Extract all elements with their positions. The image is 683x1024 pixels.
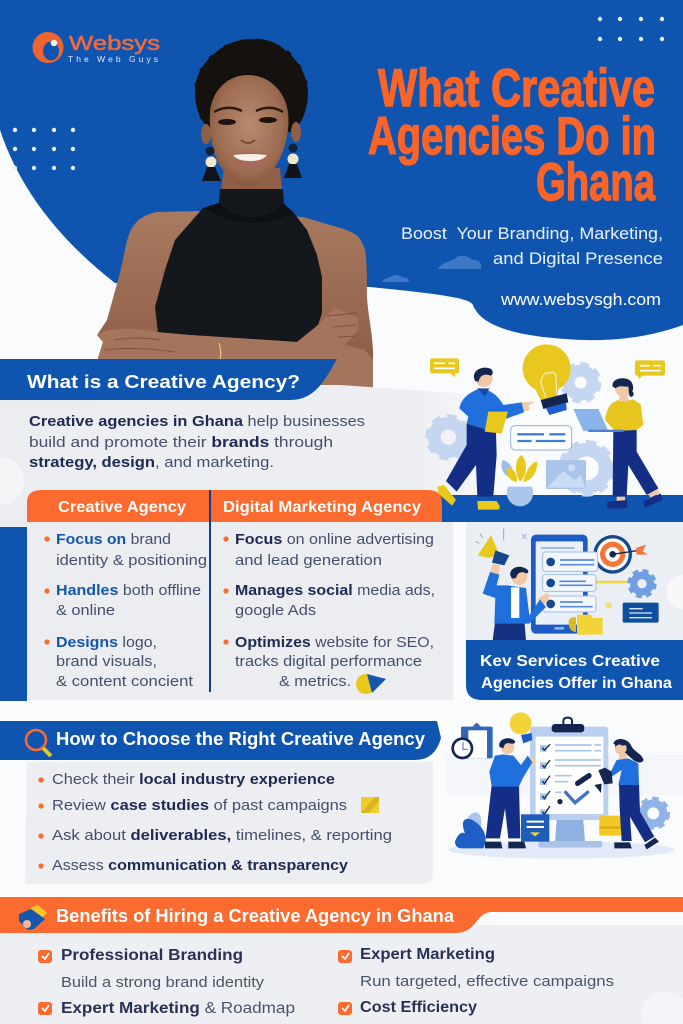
illustration: team with lightbulb	[428, 344, 665, 510]
target	[593, 535, 648, 574]
decorative circles	[0, 457, 421, 871]
title	[368, 59, 656, 212]
table body	[27, 522, 453, 700]
subtitle: Boost Your Branding, Marketing,	[401, 224, 663, 243]
digital marketing agency list: and lead generation	[235, 552, 382, 569]
table header: orange	[27, 490, 442, 522]
bracelet	[219, 343, 221, 360]
services label text: Kev Services Creative	[480, 653, 660, 670]
checklist text: Ask about deliverables, timelines, & reporting	[52, 827, 392, 844]
neck	[220, 168, 283, 198]
dots left	[13, 128, 75, 170]
digital marketing agency list: google Ads	[235, 602, 316, 619]
icon: sticky note	[361, 797, 379, 813]
creative agency list: & content concient	[56, 673, 194, 690]
gear	[639, 799, 668, 828]
cards	[543, 552, 598, 612]
expert marketing: Run targeted, effective campaigns	[360, 974, 614, 990]
gears	[428, 364, 613, 494]
turtleneck collar shade	[203, 203, 293, 223]
gear	[629, 571, 655, 596]
creative agency list: Handles both offline	[56, 582, 201, 599]
logo: Websys: Websys	[69, 33, 160, 55]
heading: how to choose	[0, 721, 441, 760]
digital marketing agency list: Optimizes website for SEO,	[235, 634, 434, 651]
website url: www.websysgh.com	[500, 290, 661, 309]
text block: definition: strategy, design , and marketing.	[29, 454, 274, 471]
ears	[201, 122, 301, 144]
checklist rows	[555, 745, 601, 792]
text block: definition: build and promote their brands through	[29, 434, 333, 451]
divider	[209, 490, 211, 692]
yellow bag	[599, 816, 621, 836]
logo: Websys: The Web Guys	[68, 54, 158, 64]
side clipboard and clock	[451, 723, 493, 759]
checklist text: Check their local industry experience	[52, 771, 335, 788]
services label text	[480, 653, 672, 692]
speech bubbles	[430, 358, 665, 379]
comparison table	[27, 490, 453, 700]
digital marketing agency list: Focus on online advertising	[235, 531, 434, 548]
clipboard	[530, 727, 608, 820]
megaphone	[478, 535, 509, 565]
creative agency list: & online	[56, 602, 115, 619]
man in blue jacket	[483, 564, 549, 640]
logo: Websys	[32, 32, 160, 64]
small sticker	[605, 602, 612, 609]
professional branding: Build a strong brand identity	[61, 975, 265, 991]
panel: what is a creative agency background	[0, 385, 513, 700]
arms and shoulders	[97, 211, 373, 390]
blue band	[440, 495, 683, 522]
icon: magnifier	[26, 730, 51, 756]
man	[437, 368, 535, 510]
digital marketing agency list: Manages social media ads,	[235, 582, 435, 599]
message card	[623, 603, 659, 623]
services label box	[466, 640, 683, 700]
panel: how to choose body	[25, 762, 433, 884]
subtitle: and Digital Presence	[493, 249, 663, 268]
folder	[569, 615, 603, 635]
nose	[241, 140, 255, 143]
plant and pot	[501, 455, 537, 506]
heading: what is a creative agency	[0, 359, 337, 400]
text block: definition	[29, 413, 365, 471]
column heading: digital marketing agency: Digital Marketing Agency	[223, 499, 421, 516]
heading: what is a creative agency: What is a Creative Agency?	[27, 372, 300, 392]
illustration: checklist team	[445, 712, 683, 859]
creative agency list: Focus on brand	[56, 531, 171, 548]
decorative circle benefits	[641, 991, 683, 1024]
expert marketing: Expert Marketing	[360, 946, 495, 963]
services label text: Agencies Offer in Ghana	[481, 675, 672, 692]
plant	[455, 812, 486, 848]
eyes and brows	[214, 108, 283, 125]
text block: definition: Creative agencies in Ghana help businesses	[29, 413, 365, 430]
illustration: phone, target and marketer	[475, 529, 659, 640]
icon: pie chart	[356, 674, 386, 694]
cloud decorations	[382, 256, 481, 282]
cost efficiency: Cost Efficiency	[360, 999, 477, 1016]
bullets	[44, 536, 229, 645]
checklist text: Review case studies of past campaigns	[52, 797, 347, 814]
black sleeveless top	[155, 189, 322, 342]
marks	[475, 529, 504, 543]
professional branding: Professional Branding	[61, 947, 243, 964]
bulb	[510, 712, 532, 743]
heading: how to choose: How to Choose the Right Creative Agency	[56, 729, 425, 749]
ground	[448, 841, 675, 859]
checklist text: Assess communication & transparency	[52, 857, 349, 874]
small blue card	[521, 814, 549, 842]
earrings	[202, 144, 302, 181]
yellow connector	[596, 581, 629, 583]
digital marketing agency list: & metrics.	[279, 673, 351, 690]
woman with laptop	[573, 378, 663, 508]
backdrop band	[445, 755, 683, 795]
face	[210, 75, 289, 187]
panel: benefits body	[0, 925, 683, 1024]
man	[485, 738, 536, 848]
chat card	[511, 426, 572, 450]
expert marketing	[360, 946, 614, 990]
heading: benefits	[0, 897, 683, 933]
woman portrait	[97, 38, 373, 390]
dots top right	[598, 17, 664, 41]
phone	[531, 535, 588, 634]
woman	[598, 739, 659, 849]
professional branding	[61, 947, 265, 991]
folded arm	[97, 308, 373, 390]
column heading: creative agency: Creative Agency	[58, 499, 186, 516]
benefits checklist	[38, 946, 614, 1017]
panel: key services	[466, 522, 683, 700]
panel left blue strip	[0, 527, 27, 701]
creative agency list	[56, 531, 207, 690]
digital marketing agency list	[235, 531, 435, 690]
subtitle	[401, 224, 663, 268]
icon: handshake	[19, 905, 47, 930]
smile	[230, 152, 270, 168]
check icons	[38, 950, 352, 1015]
creative agency list: identity & positioning	[56, 552, 207, 569]
monitor stand	[555, 820, 585, 842]
picture card	[546, 460, 586, 489]
bullets	[38, 777, 44, 869]
arrows	[566, 776, 589, 803]
hair	[194, 38, 308, 132]
heading: benefits: Benefits of Hiring a Creative Agency in Ghana	[56, 906, 455, 926]
fingers	[105, 313, 357, 352]
creative agency list: Designs logo,	[56, 634, 157, 651]
lightbulb	[523, 344, 571, 415]
checklist text	[52, 771, 392, 874]
digital marketing agency list: tracks digital performance	[235, 653, 422, 670]
header blue shape	[0, 0, 683, 340]
creative agency list: brand visuals,	[56, 653, 157, 670]
expert marketing and roadmap: Expert Marketing & Roadmap	[61, 1000, 295, 1017]
